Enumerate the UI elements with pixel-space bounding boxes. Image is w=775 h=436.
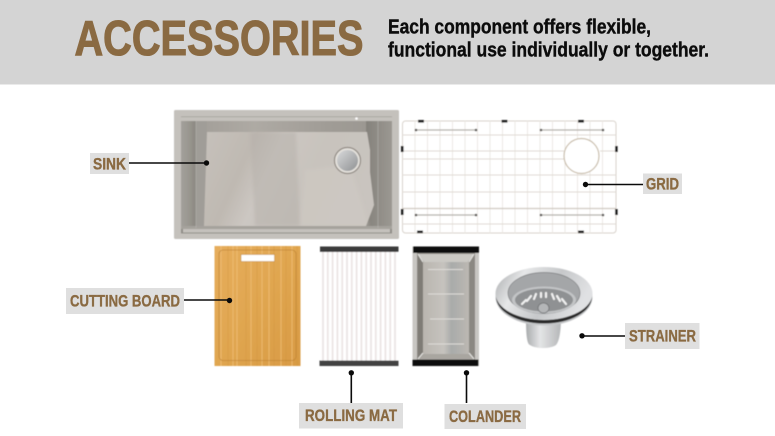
label: rolling mat: ROLLING MAT bbox=[305, 406, 397, 425]
strainer stem bbox=[526, 318, 561, 348]
title: ACCESSORIES bbox=[74, 12, 364, 66]
label: cutting board: CUTTING BOARD bbox=[70, 292, 180, 310]
image: strainer bbox=[496, 267, 592, 348]
label: strainer bbox=[579, 323, 700, 349]
image: grid bbox=[401, 120, 618, 233]
label: grid: GRID bbox=[646, 174, 679, 194]
label: colander: COLANDER bbox=[449, 407, 521, 426]
image: colander bbox=[412, 246, 479, 366]
label: grid bbox=[583, 174, 682, 194]
image: cutting board bbox=[214, 246, 300, 366]
image: sink bbox=[174, 110, 399, 239]
label: rolling mat bbox=[299, 370, 403, 428]
grid basket hole bbox=[564, 138, 599, 174]
subtitle bbox=[388, 16, 709, 62]
header band bbox=[0, 0, 775, 84]
board handle cutout bbox=[241, 254, 274, 262]
label: sink: SINK bbox=[93, 154, 127, 174]
label: strainer: STRAINER bbox=[629, 326, 696, 346]
label: cutting board bbox=[66, 288, 232, 314]
image: rolling mat bbox=[320, 246, 398, 366]
subtitle: functional use individually or together. bbox=[388, 40, 709, 62]
strainer flange bbox=[496, 268, 592, 326]
label: colander bbox=[444, 370, 526, 429]
subtitle: Each component offers flexible, bbox=[388, 16, 651, 38]
sink drain bbox=[334, 148, 360, 174]
strainer slots bbox=[522, 293, 566, 304]
label: sink bbox=[90, 153, 209, 174]
